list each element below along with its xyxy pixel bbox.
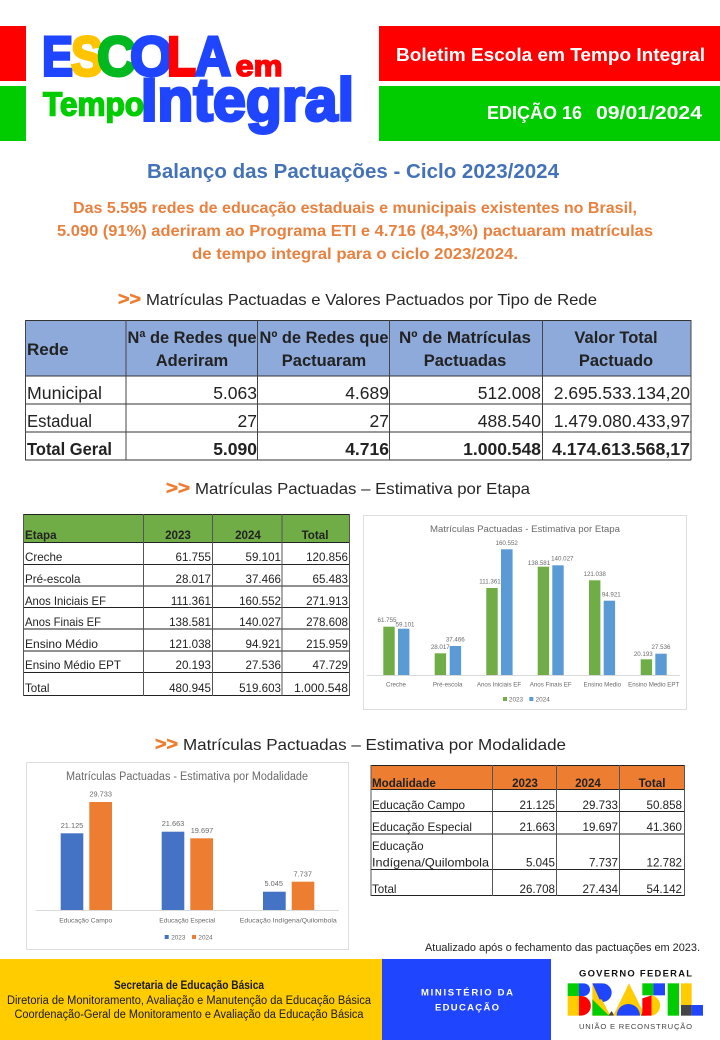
intro text block: de tempo integral para o ciclo 2023/2024.: [192, 246, 518, 263]
data labels: 27.536: [652, 644, 671, 651]
table: matrículas por modalidade: 21.663: [520, 821, 555, 834]
logo: Governo Federal Brasil: [568, 968, 703, 1031]
data labels: 7.737: [293, 870, 312, 878]
logo: Escola em Tempo Integral: Tempo: [43, 86, 144, 122]
table: matrículas por modalidade: 29.733: [583, 799, 618, 812]
data labels: 140.027: [551, 556, 574, 562]
table: matrículas por etapa: 111.361: [171, 595, 211, 608]
table: matrículas por etapa: 160.552: [239, 595, 281, 608]
table: matrículas por modalidade: Educação Campo: [372, 799, 465, 812]
title: Balanço das Pactuações - Ciclo 2023/2024: [147, 161, 560, 183]
data labels: 28.017: [431, 644, 450, 651]
intro text block: Das 5.595 redes de educação estaduais e municipais existentes no Brasil,: [73, 200, 637, 217]
table: matrículas por modalidade: 50.858: [647, 799, 682, 812]
table: matrículas e valores por tipo de rede: 2.695.533.134,20: [554, 383, 690, 403]
table: matrículas por modalidade: 19.697: [583, 821, 618, 834]
logo: Escola em Tempo Integral: Integral: [141, 66, 354, 134]
table: matrículas por etapa: 2024: [235, 529, 261, 542]
header banner: edition and date: [379, 86, 720, 141]
table: matrículas e valores por tipo de rede: Estadual: [27, 411, 92, 431]
table: matrículas e valores por tipo de rede: Rede: [27, 340, 69, 359]
data labels: 160.552: [496, 540, 518, 547]
logo: Governo Federal Brasil: UNIÃO E RECONSTRUÇÃO: [579, 1022, 692, 1031]
footer panel: secretaria: Diretoria de Monitoramento, Avaliação e Manutenção da Educação Básica: [7, 995, 372, 1007]
axis labels: Educação Indígena/Quilombola: [240, 918, 337, 924]
legend: [503, 696, 550, 703]
table: matrículas por etapa: Creche: [25, 551, 62, 564]
table: matrículas e valores por tipo de rede: 5.090: [213, 439, 257, 459]
table: matrículas por etapa: 65.483: [313, 573, 348, 586]
data labels: [61, 790, 312, 888]
data labels: 111.361: [479, 578, 501, 586]
table: matrículas por etapa: 121.038: [169, 638, 211, 651]
table: matrículas e valores por tipo de rede: 27: [238, 411, 257, 431]
table: matrículas por modalidade: 5.045: [526, 856, 555, 870]
bar chart: estimativa por etapa: Matrículas Pactuadas - Estimativa por Etapa: [430, 523, 621, 534]
table: matrículas e valores por tipo de rede: Nº de Matrículas: [399, 329, 531, 347]
logo: Escola em Tempo Integral: em: [236, 50, 282, 83]
table: matrículas por modalidade: Total: [639, 777, 665, 790]
axis labels: [59, 918, 337, 924]
icon: Brasil wordmark blocks: [568, 983, 703, 1016]
table: matrículas por etapa: 59.101: [246, 551, 281, 564]
table: matrículas por modalidade: [371, 765, 685, 896]
axis labels: Creche: [386, 682, 407, 688]
table: matrículas por etapa: 480.945: [169, 682, 211, 695]
table: matrículas e valores por tipo de rede: Nª de Redes que: [128, 329, 256, 347]
axis labels: Ensino Medio: [584, 682, 622, 688]
legend: [165, 934, 213, 941]
update note: Atualizado após o fechamento das pactuações em 2023.: [425, 942, 700, 954]
table: matrículas por modalidade: 2023: [512, 777, 538, 790]
footer panel: ministério: EDUCAÇÃO: [435, 1002, 499, 1014]
footer panel: secretaria: Secretaria de Educação Básica: [114, 980, 265, 992]
bars 2024: [398, 549, 667, 675]
table: matrículas e valores por tipo de rede: 512.008: [478, 383, 541, 403]
table: matrículas e valores por tipo de rede: Total Geral: [27, 439, 112, 459]
logo: Escola em Tempo Integral: E: [42, 24, 73, 88]
table: matrículas por modalidade: 26.708: [520, 883, 555, 896]
header banner: edition and date: 09/01/2024: [596, 103, 702, 123]
table: matrículas e valores por tipo de rede: [25, 320, 691, 460]
data labels: 138.581: [528, 560, 551, 567]
table: matrículas e valores por tipo de rede: 4.174.613.568,17: [552, 439, 690, 459]
table: matrículas por etapa: Anos Finais EF: [25, 616, 101, 629]
logo: Governo Federal Brasil: GOVERNO FEDERAL: [579, 968, 692, 978]
logo: Escola em Tempo Integral: L: [167, 24, 196, 88]
intro text block: [57, 200, 653, 263]
table: matrículas por etapa: 215.959: [306, 638, 348, 651]
table: matrículas por modalidade: Indígena/Quilombola: [372, 856, 490, 870]
axis labels: Ensino Medio EPT: [628, 682, 680, 688]
section heading: etapa: Matrículas Pactuadas – Estimativa por Etapa: [195, 481, 530, 498]
section heading: tipo de rede: >>: [118, 289, 141, 309]
logo: Escola em Tempo Integral: S: [71, 24, 103, 88]
table: matrículas por etapa: 47.729: [313, 659, 348, 672]
table: matrículas por etapa: Anos Iniciais EF: [25, 595, 106, 608]
header banner: bulletin name: [379, 26, 720, 81]
data labels: 21.125: [61, 821, 83, 830]
data labels: 20.193: [634, 651, 653, 658]
header: left colour tabs: [0, 26, 26, 141]
data labels: 5.045: [264, 879, 283, 888]
table: matrículas por etapa: 28.017: [176, 573, 211, 586]
table: matrículas por etapa: 2023: [165, 529, 191, 542]
table: matrículas por etapa: Total: [25, 682, 50, 695]
table: matrículas por etapa: Ensino Médio EPT: [25, 659, 121, 672]
footer panel: ministério: [382, 959, 551, 1040]
data labels: 29.733: [89, 790, 112, 798]
axis labels: Anos Finais EF: [530, 682, 572, 688]
intro text block: 5.090 (91%) aderiram ao Programa ETI e 4.716 (84,3%) pactuaram matrículas: [57, 223, 653, 240]
table: matrículas e valores por tipo de rede: Nº de Redes que: [260, 329, 388, 347]
axis labels: Educação Especial: [159, 918, 216, 924]
table: matrículas por etapa: 519.603: [239, 682, 281, 695]
bars 2023: [383, 567, 652, 675]
table: matrículas por modalidade: Total: [372, 883, 396, 896]
section heading: modalidade: >>: [155, 734, 178, 754]
table: matrículas e valores por tipo de rede: 4.716: [345, 439, 389, 459]
table: matrículas e valores por tipo de rede: Pactuadas: [424, 352, 506, 370]
legend: 2024: [198, 934, 213, 941]
table: matrículas por etapa: Pré-escola: [25, 573, 81, 586]
header banner: bulletin name: Boletim Escola em Tempo Integral: [396, 45, 705, 65]
legend: 2023: [509, 696, 524, 703]
section heading: modalidade: Matrículas Pactuadas – Estimativa por Modalidade: [183, 737, 566, 754]
table: matrículas por modalidade: 2024: [575, 777, 601, 790]
axis labels: Anos Iniciais EF: [477, 682, 521, 688]
table: matrículas por modalidade: Educação: [372, 840, 424, 853]
table: matrículas por etapa: Ensino Médio: [25, 638, 98, 651]
footer panel: ministério: MINISTÉRIO DA: [421, 988, 513, 998]
header banner: edition and date: EDIÇÃO 16: [487, 102, 582, 123]
table: matrículas por etapa: [23, 514, 350, 696]
legend: 2024: [536, 696, 550, 703]
table: matrículas por etapa: 27.536: [246, 659, 281, 672]
logo: Escola em Tempo Integral: [42, 24, 354, 134]
bar chart: estimativa por modalidade: Matrículas Pactuadas - Estimativa por Modalidade: [66, 771, 308, 783]
table: matrículas por etapa: 20.193: [176, 659, 211, 672]
table: matrículas por etapa: Etapa: [25, 529, 57, 542]
logo: Escola em Tempo Integral: O: [130, 24, 173, 88]
logo: Escola em Tempo Integral: C: [97, 24, 136, 88]
axis labels: [386, 682, 680, 688]
data labels: [378, 540, 671, 658]
table: matrículas e valores por tipo de rede: 4.689: [345, 383, 389, 403]
table: matrículas e valores por tipo de rede: Valor Total: [574, 329, 658, 347]
table: matrículas e valores por tipo de rede: Aderiram: [156, 352, 228, 370]
bars 2023: [61, 832, 286, 910]
bar chart: estimativa por modalidade: [26, 762, 348, 950]
footer panel: secretaria: [0, 959, 382, 1040]
table: matrículas e valores por tipo de rede: 1.000.548: [463, 439, 541, 459]
table: matrículas por modalidade: 12.782: [647, 856, 682, 870]
table: matrículas por etapa: 138.581: [169, 616, 211, 629]
table: matrículas por modalidade: Modalidade: [372, 777, 436, 790]
table: matrículas por etapa: 1.000.548: [294, 682, 348, 695]
logo: Escola em Tempo Integral: A: [195, 24, 231, 88]
legend: 2023: [171, 934, 186, 941]
table: matrículas por etapa: 140.027: [239, 616, 281, 629]
data labels: 37.466: [446, 636, 465, 644]
data labels: 61.755: [378, 617, 397, 624]
table: matrículas e valores por tipo de rede: 1.479.080.433,97: [554, 411, 690, 431]
footer panel: secretaria: Coordenação-Geral de Monitoramento e Avaliação da Educação Básica: [14, 1009, 364, 1021]
data labels: 59.101: [396, 622, 415, 628]
table: matrículas por modalidade: Educação Especial: [372, 821, 472, 834]
axis labels: Pré-escola: [433, 682, 463, 688]
section heading: tipo de rede: Matrículas Pactuadas e Valores Pactuados por Tipo de Rede: [146, 292, 597, 309]
table: matrículas e valores por tipo de rede: Municipal: [27, 383, 102, 403]
data labels: 94.921: [602, 592, 621, 598]
table: matrículas por etapa: 61.755: [176, 551, 211, 564]
table: matrículas e valores por tipo de rede: Pactuaram: [282, 352, 366, 370]
table: matrículas por modalidade: 41.360: [647, 821, 682, 834]
table: matrículas por modalidade: 27.434: [583, 883, 619, 896]
table: matrículas por etapa: 271.913: [306, 595, 348, 608]
table: matrículas por etapa: 94.921: [246, 638, 281, 651]
table: matrículas por modalidade: 54.142: [647, 883, 682, 896]
data labels: 19.697: [191, 826, 213, 835]
table: matrículas por etapa: Total: [302, 529, 328, 542]
table: matrículas por etapa: 278.608: [306, 616, 348, 629]
data labels: 121.038: [584, 571, 606, 578]
data labels: 21.663: [162, 819, 184, 828]
table: matrículas e valores por tipo de rede: Pactuado: [579, 352, 653, 370]
table: matrículas por modalidade: 21.125: [520, 799, 555, 812]
axis labels: Educação Campo: [59, 918, 112, 924]
table: matrículas por etapa: 37.466: [246, 573, 281, 586]
bar chart: estimativa por etapa: [364, 516, 686, 710]
table: matrículas e valores por tipo de rede: 5.063: [213, 383, 257, 403]
section heading: etapa: >>: [166, 478, 190, 498]
table: matrículas por modalidade: 7.737: [589, 856, 618, 870]
table: matrículas por etapa: 120.856: [306, 551, 348, 564]
table: matrículas e valores por tipo de rede: 27: [370, 411, 389, 431]
bars 2024: [89, 802, 314, 910]
table: matrículas e valores por tipo de rede: 488.540: [478, 411, 541, 431]
